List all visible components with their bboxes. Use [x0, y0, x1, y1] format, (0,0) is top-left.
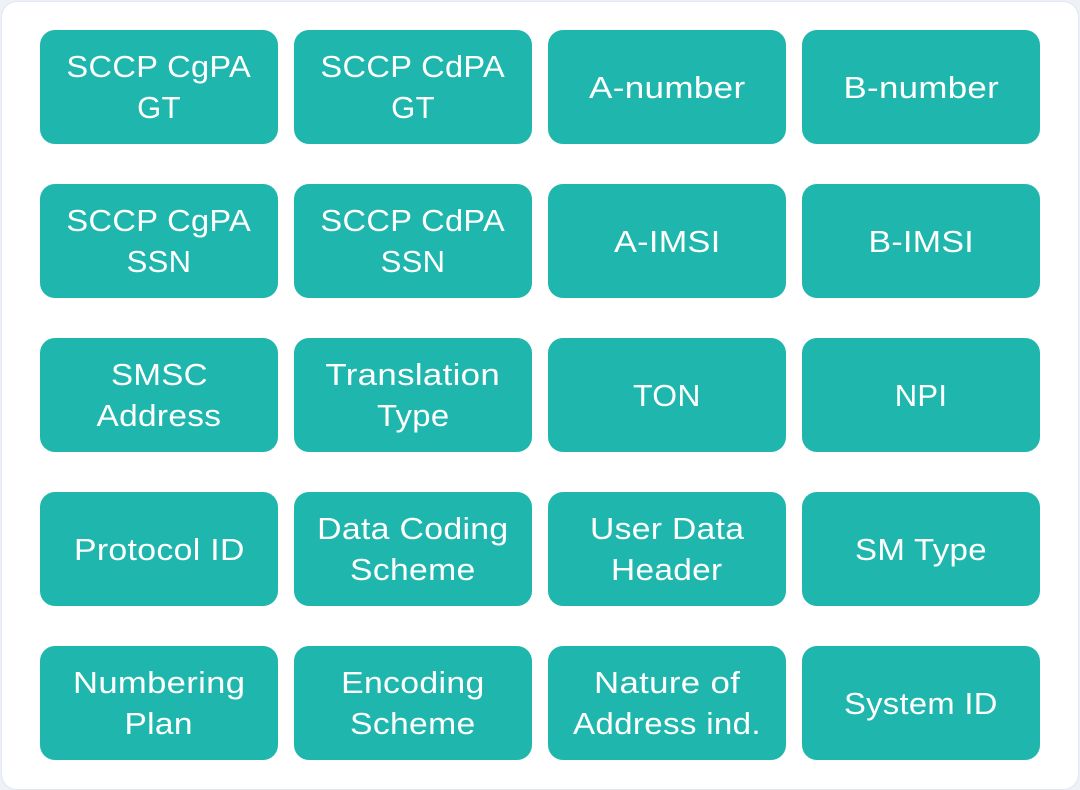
card: B-IMSI: [802, 184, 1040, 298]
card: System ID: System ID: [844, 686, 998, 720]
card: Encoding Scheme: Encoding: [341, 665, 485, 700]
card: SCCP CgPA SSN: [40, 184, 278, 298]
card: A-IMSI: A-IMSI: [614, 224, 720, 258]
card: User Data Header: [548, 492, 786, 606]
card: User Data Header: User Data: [590, 511, 744, 546]
card: System ID: [802, 646, 1040, 760]
card: Protocol ID: Protocol ID: [74, 532, 244, 566]
card: SMSC Address: Address: [97, 398, 221, 433]
card: SCCP CgPA GT: SCCP CgPA: [67, 49, 251, 84]
card: SCCP CdPA SSN: SSN: [381, 244, 445, 279]
card: SCCP CgPA SSN: SSN: [127, 244, 191, 279]
card: A-IMSI: [548, 184, 786, 298]
card: SCCP CdPA GT: GT: [391, 90, 435, 125]
card: SCCP CgPA GT: GT: [137, 90, 181, 125]
card: B-number: [802, 30, 1040, 144]
card: Nature of Address ind.: Nature of: [594, 665, 740, 700]
card: NPI: NPI: [895, 378, 947, 412]
card: SCCP CgPA SSN: SCCP CgPA: [67, 203, 251, 238]
card: Translation Type: [294, 338, 532, 452]
card: Data Coding Scheme: Scheme: [350, 552, 476, 587]
card: Numbering Plan: Plan: [125, 706, 193, 741]
card: A-number: A-number: [589, 70, 745, 104]
card: SMSC Address: [40, 338, 278, 452]
card: B-IMSI: B-IMSI: [868, 224, 974, 258]
card: SCCP CdPA SSN: [294, 184, 532, 298]
card: User Data Header: Header: [611, 552, 723, 587]
card: Protocol ID: [40, 492, 278, 606]
card: SCCP CdPA SSN: SCCP CdPA: [321, 203, 505, 238]
card: SMSC Address: SMSC: [111, 357, 207, 392]
card: Data Coding Scheme: Data Coding: [317, 511, 509, 546]
card: Encoding Scheme: [294, 646, 532, 760]
card: NPI: [802, 338, 1040, 452]
card: Numbering Plan: Numbering: [73, 665, 245, 700]
card: SCCP CdPA GT: SCCP CdPA: [321, 49, 505, 84]
card: Nature of Address ind.: Address ind.: [573, 706, 761, 741]
card: SM Type: SM Type: [855, 532, 987, 566]
card: B-number: B-number: [843, 70, 999, 104]
card: SM Type: [802, 492, 1040, 606]
card: Data Coding Scheme: [294, 492, 532, 606]
card: Encoding Scheme: Scheme: [350, 706, 476, 741]
card: TON: TON: [633, 378, 701, 412]
card: A-number: [548, 30, 786, 144]
card: Translation Type: Translation: [326, 357, 500, 392]
card: Nature of Address ind.: [548, 646, 786, 760]
card: Numbering Plan: [40, 646, 278, 760]
card: Translation Type: Type: [377, 398, 449, 433]
card: SCCP CdPA GT: [294, 30, 532, 144]
card: TON: [548, 338, 786, 452]
card: SCCP CgPA GT: [40, 30, 278, 144]
